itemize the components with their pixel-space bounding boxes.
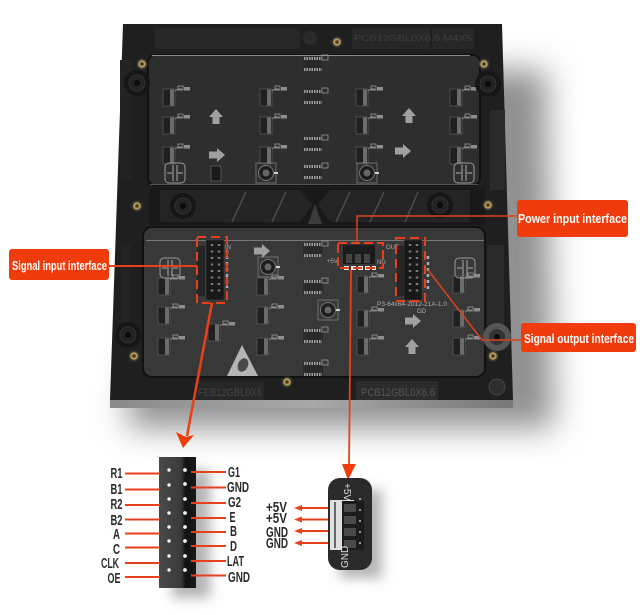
power pin labels	[266, 500, 288, 552]
right pin labels: GND	[227, 480, 249, 496]
board silkscreen labels: IN	[225, 245, 231, 251]
board frame	[110, 24, 513, 408]
bottom PCB panel	[143, 227, 485, 377]
right pin labels: GND	[228, 570, 250, 586]
connector block	[159, 457, 196, 588]
leader: signal output	[428, 270, 522, 340]
top panel arrows	[209, 108, 416, 162]
middle rib band	[150, 187, 485, 225]
signal output connector	[397, 240, 428, 300]
bottom panel ICs	[303, 241, 328, 376]
left pin labels: R2	[110, 497, 122, 513]
pin leader lines	[125, 472, 226, 577]
board silkscreen labels: ND	[377, 260, 386, 266]
right pin labels: D	[230, 539, 237, 555]
callout: signal output interface	[521, 323, 636, 352]
board silkscreen labels: P3-64x64-2012-21A-1.0	[377, 301, 447, 308]
bottom panel arrows	[254, 244, 421, 354]
leader: signal input	[108, 265, 197, 267]
right pin labels	[227, 465, 250, 586]
top panel driver modules	[163, 86, 477, 164]
dashed highlight: power input	[338, 243, 383, 268]
right pin labels: G2	[228, 495, 241, 511]
signal input connector	[197, 240, 227, 300]
board silkscreen labels: OUT	[386, 245, 399, 251]
power connector diagram	[266, 478, 372, 570]
top PCB panel	[148, 55, 480, 185]
LED panel board	[110, 24, 513, 408]
callout: signal input interface: Signal input interface	[12, 258, 107, 273]
arrow: signal input to pinout	[176, 303, 212, 448]
right pin labels: E	[230, 510, 236, 526]
power wire arrows	[294, 505, 328, 546]
board drop shadow	[128, 70, 554, 598]
left pin labels: R1	[110, 466, 122, 482]
board silkscreen labels: GD	[417, 309, 427, 315]
right pin labels: LAT	[227, 554, 244, 570]
arrow: power input to connector	[342, 270, 356, 480]
left pin labels: B1	[110, 482, 122, 498]
callout: power input interface	[517, 200, 628, 237]
callout: signal input interface	[9, 249, 109, 280]
mounting bosses	[115, 31, 511, 395]
right pin labels: G1	[228, 465, 240, 481]
connector PCB	[328, 478, 372, 570]
pinout diagram: 16-pin signal connector	[101, 457, 250, 588]
moulded part codes	[196, 381, 438, 400]
left pin labels	[101, 466, 122, 587]
brass screws	[128, 36, 498, 388]
dashed highlight: signal input	[197, 237, 227, 303]
leader: power input	[357, 216, 518, 243]
board silkscreen labels: +5V	[327, 259, 338, 265]
left pin labels: CLK	[101, 556, 119, 572]
power pin labels: +5V	[266, 511, 287, 527]
top panel capacitors	[165, 163, 474, 183]
left pin labels: C	[113, 542, 120, 558]
safety triangle logo	[227, 345, 258, 376]
power pin labels: +5V	[266, 500, 287, 516]
left pin labels: A	[113, 527, 120, 543]
silver lower edge	[110, 400, 513, 408]
frame top ribs	[120, 28, 505, 330]
connector PCB: GND	[340, 546, 351, 568]
dashed highlight: signal output	[396, 238, 425, 301]
moulded part codes: PCB12GBL0X6.6	[361, 387, 435, 399]
top panel ICs	[303, 55, 328, 179]
frame top serial text: PCB12GBL0X6.6 M4X5	[354, 34, 473, 43]
power pin labels: GND	[266, 536, 288, 552]
bottom panel driver modules	[158, 273, 480, 355]
left pin labels: B2	[110, 513, 122, 529]
board silkscreen labels	[225, 245, 447, 315]
bottom panel capacitors	[160, 257, 475, 320]
power connector on board	[343, 245, 376, 268]
power pin labels: GND	[266, 525, 288, 541]
connector PCB: +5V	[341, 483, 352, 501]
right pin labels: B	[230, 524, 237, 540]
left pin labels: OE	[108, 571, 121, 587]
moulded part codes: FEB12GBL0X6	[198, 387, 262, 399]
